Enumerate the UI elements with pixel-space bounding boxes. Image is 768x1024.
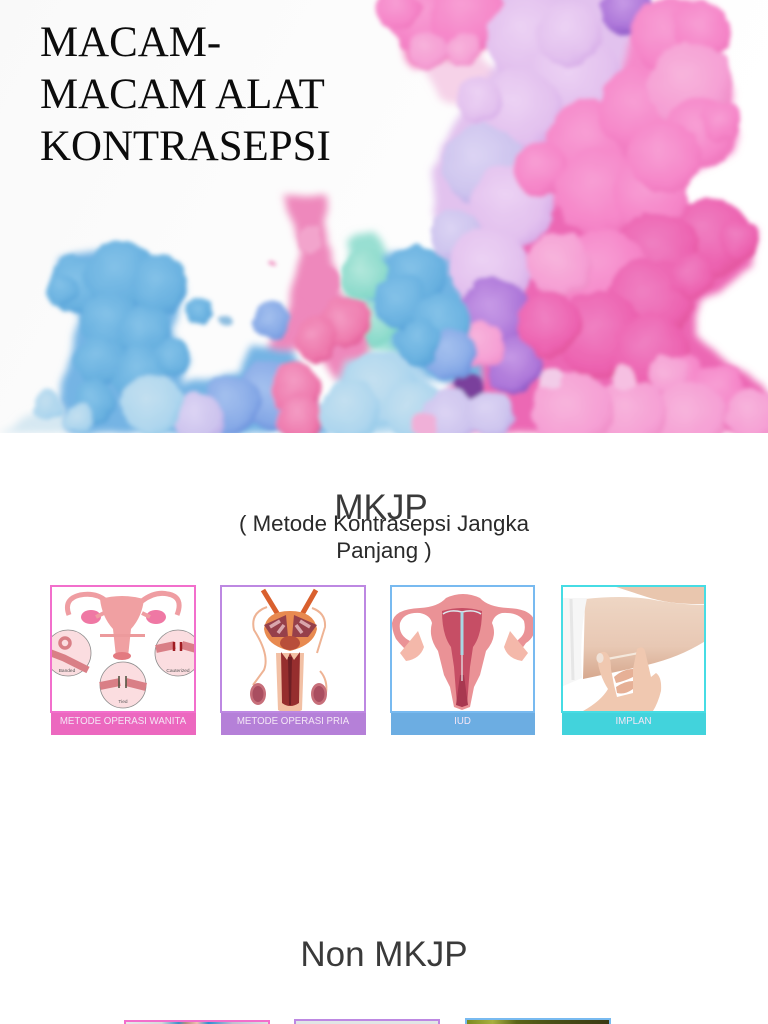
label: metode operasi pria: METODE OPERASI PRIA xyxy=(237,716,349,727)
image: female sterilisation: Banded xyxy=(59,668,76,674)
label: implan xyxy=(562,713,706,735)
image: female sterilisation: Cauterized xyxy=(166,668,190,674)
panel: implan xyxy=(561,585,706,735)
label: IUD: IUD xyxy=(454,716,471,727)
panel: non-MKJP card 2 xyxy=(294,1019,440,1024)
image: uterus with IUD xyxy=(390,585,535,713)
illustration: pink and blue ink clouds xyxy=(3,0,768,433)
panel: non-MKJP card 3 xyxy=(465,1018,611,1024)
text block: MKJP subtitle: ( Metode Kontrasepsi Jangka xyxy=(239,510,529,536)
label: metode operasi wanita xyxy=(50,713,196,735)
title xyxy=(40,19,331,170)
title: KONTRASEPSI xyxy=(40,123,331,170)
title: MACAM- xyxy=(40,19,221,66)
puffs xyxy=(34,0,768,454)
image: arm with implant xyxy=(561,585,706,713)
image: female sterilisation: Tied xyxy=(118,699,128,705)
heading: Non MKJP: Non MKJP xyxy=(300,935,468,974)
label: metode operasi pria xyxy=(220,713,366,735)
text block: MKJP subtitle: Panjang ) xyxy=(336,538,432,562)
base washes xyxy=(0,0,768,433)
title: MACAM ALAT xyxy=(40,71,325,118)
panel: metode operasi pria xyxy=(220,585,366,735)
panel: IUD xyxy=(390,585,535,735)
panel: metode operasi wanita xyxy=(50,585,196,735)
label: implan: IMPLAN xyxy=(615,716,652,727)
panel: hero banner with ink smoke xyxy=(0,0,768,433)
label: IUD xyxy=(390,713,534,735)
panel: non-MKJP card 1 xyxy=(124,1020,270,1024)
image: male reproductive anatomy xyxy=(220,585,366,713)
heading: MKJP: MKJP xyxy=(334,488,428,527)
image: female sterilisation xyxy=(50,585,196,713)
label: metode operasi wanita: METODE OPERASI WANITA xyxy=(60,716,186,727)
text block: MKJP subtitle xyxy=(239,510,530,562)
